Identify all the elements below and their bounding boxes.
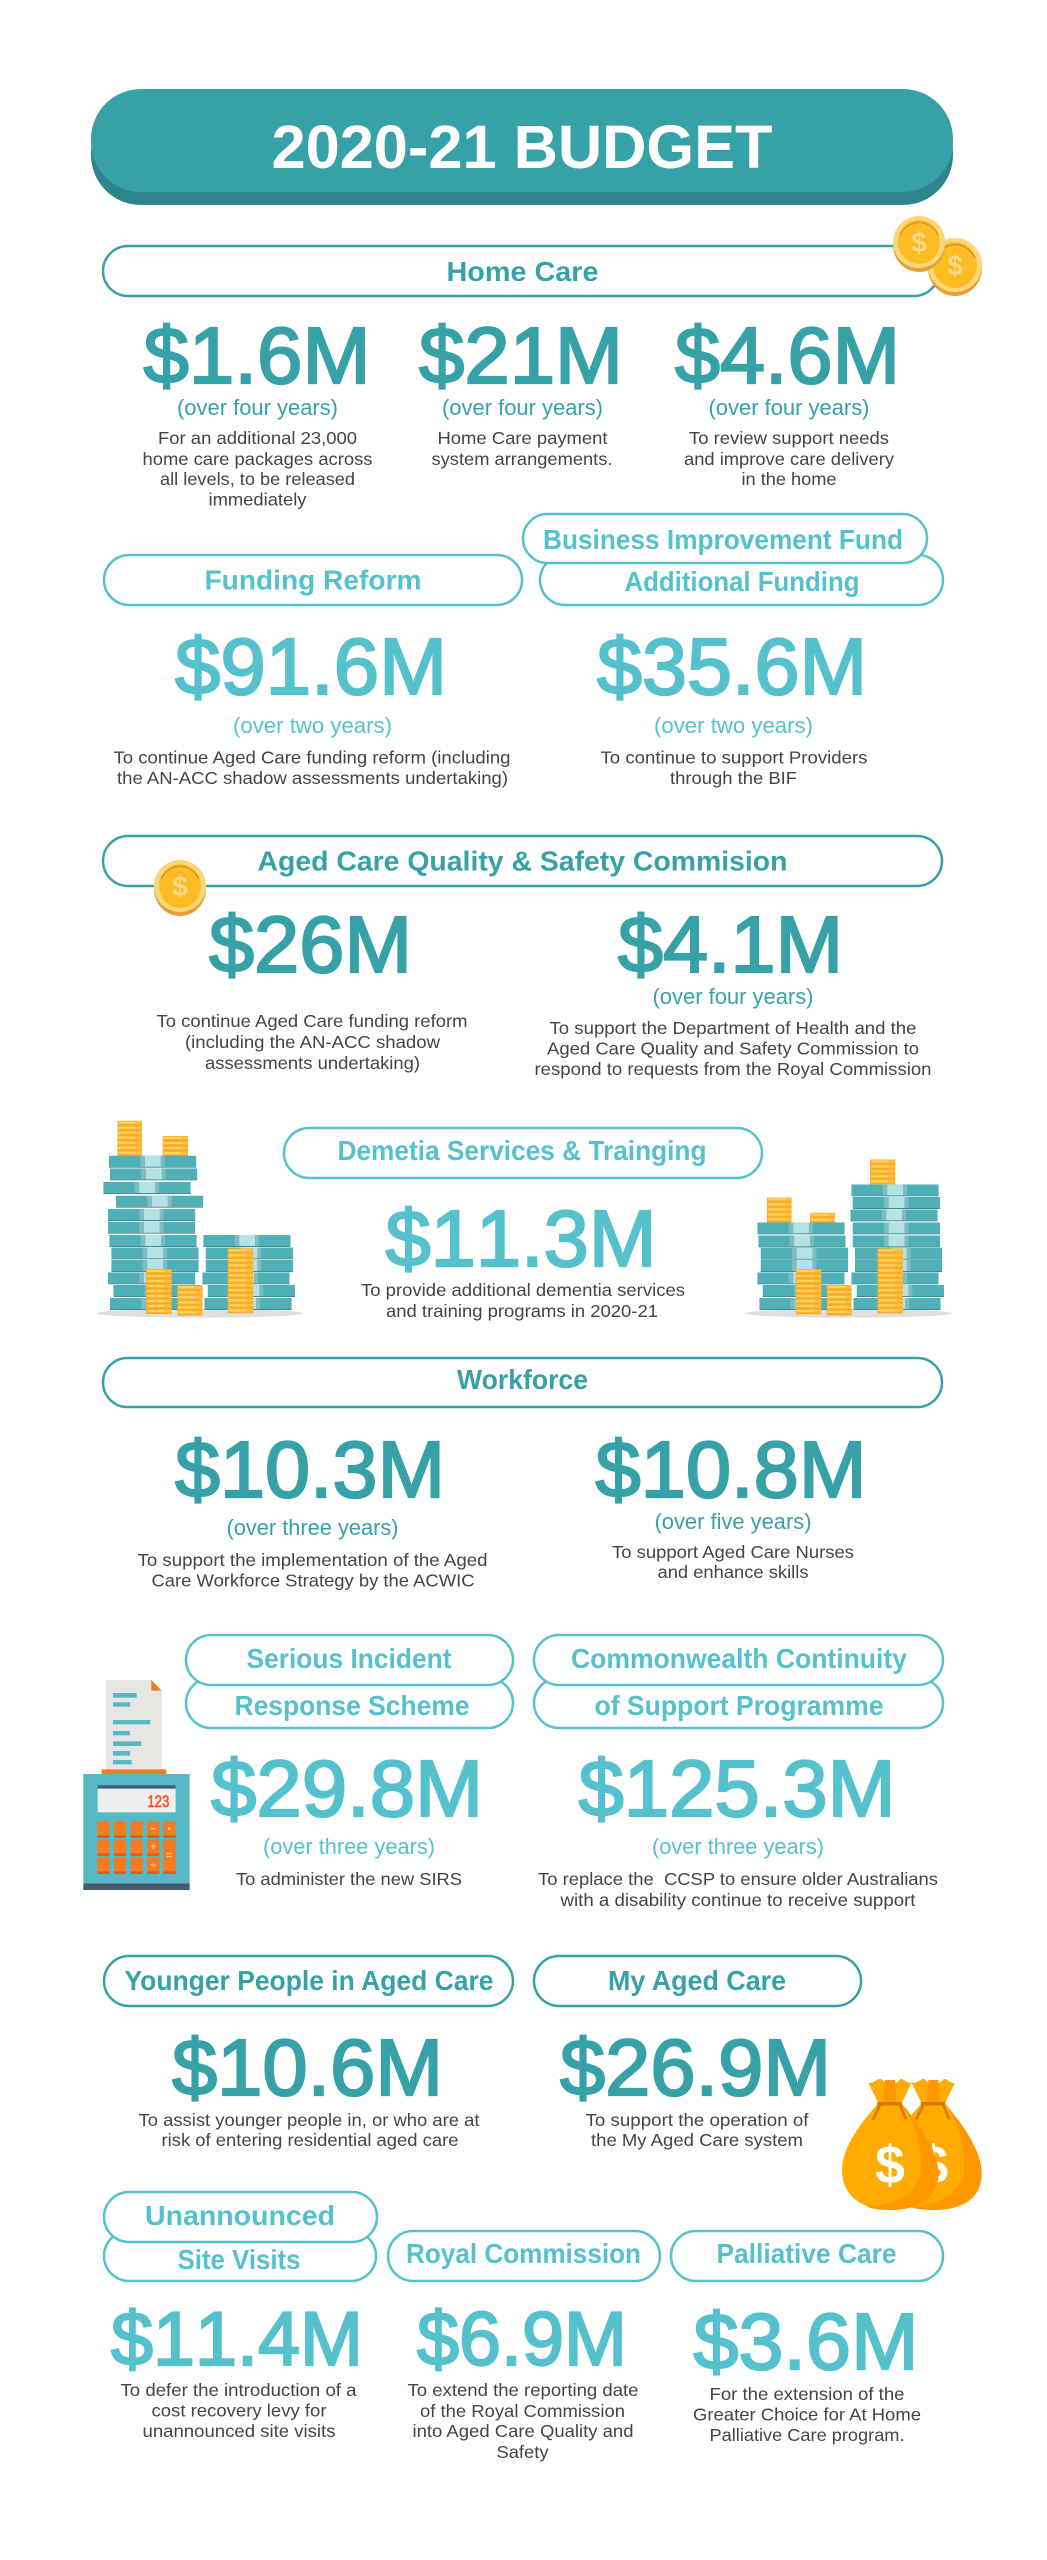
amount: $35.6M: through the BIF: [670, 768, 797, 788]
amount: $1.6M: For an additional 23,000: [158, 428, 357, 448]
amount: $3.6M: Greater Choice for At Home: [693, 2404, 921, 2424]
heading: additional funding: Additional Funding: [624, 566, 860, 597]
amount: $3.6M: Palliative Care program.: [710, 2425, 904, 2445]
amount: $26.9M: [560, 2023, 831, 2150]
amount: $26.9M: the My Aged Care system: [591, 2130, 803, 2150]
amount: $10.3M: $10.3M: [175, 1425, 445, 1514]
amount: $1.6M: home care packages across: [142, 449, 373, 469]
icon: money bags: [842, 2079, 982, 2210]
panel: aged care quality and safety commission: [103, 836, 942, 1079]
panel: workforce: [103, 1358, 942, 1590]
icon: money bags: $: [875, 2136, 905, 2195]
amount: $11.4M: To defer the introduction of a: [120, 2380, 357, 2400]
panel: home care: [103, 216, 982, 510]
heading: site visits: [104, 2231, 376, 2281]
amount: $91.6M: $91.6M: [175, 622, 447, 711]
amount: $3.6M: $3.6M: [694, 2297, 918, 2386]
amount: $26M: To continue Aged Care funding reform: [156, 1011, 468, 1031]
amount: $10.8M: To support Aged Care Nurses: [612, 1542, 854, 1562]
amount: $1.6M: immediately: [208, 490, 307, 510]
amount: $4.1M: [534, 900, 932, 1079]
icon: calculator with receipt: ÷: [151, 1860, 157, 1871]
amount: $10.3M: Care Workforce Strategy by the ACWIC: [152, 1570, 474, 1590]
amount: $1.6M: all levels, to be released: [160, 469, 355, 489]
amount: $6.9M: Safety: [496, 2442, 549, 2462]
amount: $4.6M: To review support needs: [689, 428, 889, 448]
heading: aged care quality: [103, 836, 942, 886]
heading: palliative care: Palliative Care: [716, 2238, 896, 2269]
amount: $10.8M: $10.8M: [596, 1425, 866, 1514]
heading: response scheme: [186, 1678, 513, 1728]
amount: $26M: [156, 900, 468, 1073]
panel: dementia services: [96, 1121, 952, 1385]
amount: $35.6M: (over two years): [654, 713, 813, 738]
amount: $10.6M: $10.6M: [172, 2023, 443, 2112]
panel: younger people in aged care: [104, 1956, 513, 2150]
amount: $4.1M: respond to requests from the Royal Commission: [534, 1059, 932, 1079]
panel: business improvement fund: [523, 514, 943, 788]
amount: $11.4M: cost recovery levy for: [152, 2400, 327, 2420]
heading: of support programme: [534, 1678, 943, 1728]
amount: $21M: Home Care payment: [438, 428, 608, 448]
amount: $4.6M: and improve care delivery: [684, 449, 894, 469]
icon: calculator with receipt: =: [166, 1851, 172, 1862]
heading: unannounced: Unannounced: [145, 2200, 335, 2231]
amount: $11.3M: $11.3M: [386, 1194, 656, 1283]
icon: calculator with receipt: +: [150, 1842, 156, 1853]
amount: $4.1M: To support the Department of Health and the: [550, 1018, 916, 1038]
panel: royal commission: [388, 2231, 660, 2462]
heading: funding reform: Funding Reform: [204, 564, 422, 596]
amount: $4.1M: $4.1M: [618, 900, 843, 989]
heading: younger people: [104, 1956, 513, 2006]
heading: business improvement fund: [523, 514, 927, 563]
panel: serious incident response scheme: [83, 1635, 513, 1890]
amount: $4.6M: in the home: [742, 469, 836, 489]
icon: calculator with receipt: •: [168, 1824, 172, 1835]
amount: $1.6M: [142, 311, 373, 510]
amount: $11.3M: [361, 1194, 685, 1321]
amount: $125.3M: [538, 1744, 938, 1910]
panel: my aged care: [534, 1956, 982, 2210]
heading: my aged care: [534, 1956, 861, 2006]
amount: $21M: [419, 311, 623, 469]
panel: funding reform: [104, 555, 522, 788]
icon: money stacks right: [746, 1159, 952, 1385]
panel: commonwealth continuity of support: [534, 1635, 943, 1910]
amount: $4.6M: (over four years): [708, 395, 870, 420]
amount: $35.6M: To continue to support Providers: [600, 748, 868, 768]
heading: commonwealth continuity: [534, 1635, 943, 1685]
amount: $26M: assessments undertaking): [205, 1053, 420, 1073]
amount: $10.8M: [596, 1425, 866, 1582]
amount: $10.3M: (over three years): [226, 1515, 398, 1540]
amount: $10.8M: and enhance skills: [658, 1562, 809, 1582]
heading: additional funding: [540, 555, 943, 605]
heading: royal commission: Royal Commission: [406, 2238, 641, 2269]
amount: $1.6M: $1.6M: [144, 311, 370, 400]
amount: $10.8M: (over five years): [654, 1509, 812, 1534]
amount: $1.6M: (over four years): [177, 395, 338, 420]
amount: $10.6M: To assist younger people in, or who are at: [138, 2110, 480, 2130]
amount: $26M: (including the AN-ACC shadow: [185, 1032, 440, 1052]
amount: $4.1M: Aged Care Quality and Safety Commission to: [547, 1038, 919, 1058]
amount: $35.6M: $35.6M: [597, 622, 867, 711]
amount: $125.3M: (over three years): [652, 1834, 824, 1859]
amount: $35.6M: [597, 622, 868, 788]
icon: money bags: $: [918, 2136, 948, 2195]
heading: home care: [103, 246, 939, 296]
heading: business improvement fund: Business Improvement Fund: [543, 524, 903, 555]
amount: $10.3M: To support the implementation of the Aged: [138, 1550, 488, 1570]
amount: $125.3M: with a disability continue to receive support: [559, 1890, 916, 1910]
amount: $4.6M: [675, 311, 900, 489]
amount: $26M: $26M: [209, 900, 412, 989]
amount: $6.9M: [408, 2297, 638, 2462]
amount: $11.3M: and training programs in 2020-21: [386, 1301, 658, 1321]
heading: of support programme: of Support Programme: [594, 1690, 884, 1721]
amount: $10.3M: [138, 1425, 488, 1590]
heading: response scheme: Response Scheme: [234, 1690, 470, 1721]
icon: two gold coins: $: [947, 250, 963, 281]
amount: $21M: (over four years): [442, 395, 603, 420]
title banner: 2020-21 BUDGET: [272, 113, 772, 181]
amount: $125.3M: To replace the CCSP to ensure older Australians: [538, 1869, 938, 1889]
heading: royal commission: [388, 2231, 660, 2281]
heading: site visits: Site Visits: [178, 2244, 300, 2275]
amount: $6.9M: $6.9M: [417, 2297, 627, 2382]
amount: $29.8M: To administer the new SIRS: [236, 1869, 462, 1889]
heading: aged care quality: Aged Care Quality & Safety Commision: [258, 846, 788, 876]
icon: calculator with receipt: 123: [147, 1792, 169, 1811]
amount: $10.6M: risk of entering residential aged care: [162, 2130, 458, 2150]
amount: $26.9M: To support the operation of: [586, 2110, 809, 2130]
heading: funding reform: [104, 555, 522, 605]
amount: $11.3M: To provide additional dementia services: [361, 1280, 685, 1300]
icon: money stacks left: [96, 1121, 303, 1385]
amount: $11.4M: [111, 2297, 363, 2441]
title banner: [91, 89, 953, 205]
heading: dementia services: [284, 1128, 762, 1178]
amount: $10.6M: [138, 2023, 480, 2150]
heading: my aged care: My Aged Care: [608, 1965, 786, 1996]
amount: $91.6M: To continue Aged Care funding reform (including: [114, 748, 511, 768]
panel: unannounced site visits: [104, 2192, 377, 2441]
heading: commonwealth continuity: Commonwealth Continuity: [571, 1643, 907, 1674]
amount: $6.9M: of the Royal Commission: [420, 2401, 625, 2421]
heading: workforce: Workforce: [457, 1364, 588, 1395]
icon: two gold coins: [893, 216, 982, 296]
amount: $11.4M: unannounced site visits: [142, 2421, 336, 2441]
amount: $4.6M: $4.6M: [675, 311, 900, 400]
amount: $125.3M: $125.3M: [578, 1744, 896, 1833]
icon: calculator with receipt: −: [150, 1824, 156, 1835]
amount: $29.8M: (over three years): [263, 1834, 435, 1859]
icon: gold coin: [154, 860, 206, 916]
panel: palliative care: [671, 2231, 943, 2445]
heading: younger people: Younger People in Aged Care: [124, 1965, 494, 1996]
amount: $91.6M: (over two years): [233, 713, 392, 738]
heading: serious incident: Serious Incident: [246, 1643, 452, 1674]
icon: two gold coins: $: [911, 227, 927, 258]
amount: $29.8M: $29.8M: [211, 1744, 483, 1833]
amount: $3.6M: For the extension of the: [710, 2384, 904, 2404]
amount: $3.6M: [693, 2297, 921, 2445]
heading: workforce: [103, 1358, 942, 1407]
amount: $91.6M: [114, 622, 511, 788]
amount: $6.9M: To extend the reporting date: [408, 2380, 638, 2400]
icon: gold coin: $: [172, 871, 188, 902]
heading: unannounced: [104, 2192, 377, 2242]
amount: $29.8M: [211, 1744, 483, 1889]
amount: $26.9M: $26.9M: [560, 2023, 831, 2112]
heading: dementia services: Demetia Services & Trainging: [338, 1135, 706, 1166]
amount: $4.1M: (over four years): [652, 984, 814, 1009]
amount: $21M: $21M: [419, 311, 623, 400]
amount: $91.6M: the AN-ACC shadow assessments undertaking): [117, 768, 508, 788]
amount: $11.4M: $11.4M: [111, 2297, 363, 2382]
amount: $21M: system arrangements.: [432, 449, 612, 469]
heading: palliative care: [671, 2231, 943, 2281]
heading: home care: Home Care: [446, 256, 598, 287]
heading: serious incident: [186, 1635, 513, 1685]
amount: $6.9M: into Aged Care Quality and: [412, 2421, 634, 2441]
icon: calculator with receipt: [83, 1680, 190, 1890]
